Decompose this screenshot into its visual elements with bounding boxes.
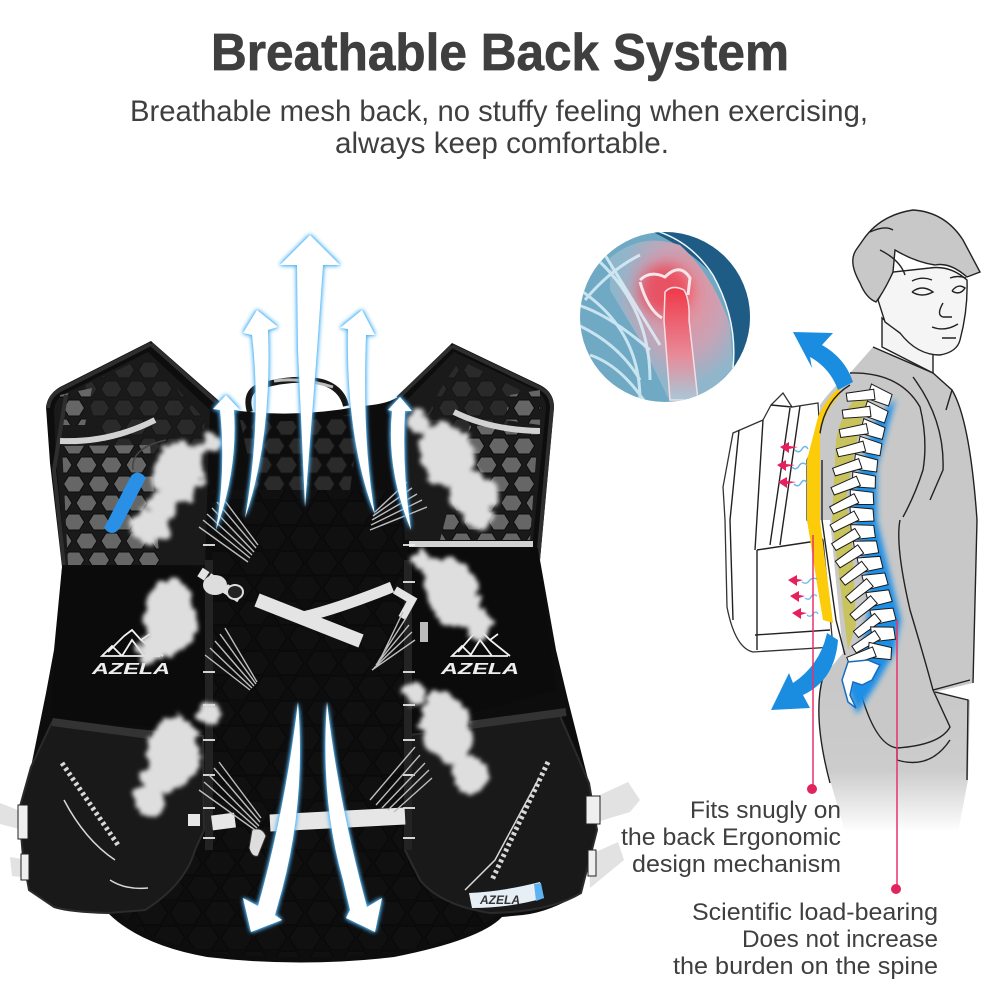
red glow — [639, 264, 691, 316]
humerus — [664, 287, 698, 400]
subtitle: Breathable mesh back, no stuffy feeling when exercising, — [130, 95, 868, 128]
spine glow — [848, 398, 901, 714]
right lower pocket — [405, 716, 597, 913]
callout: fits snugly: Fits snugly on — [690, 797, 841, 824]
side straps — [0, 782, 640, 888]
lower strap — [188, 816, 405, 823]
pocket shirring — [52, 712, 566, 735]
shirt — [820, 347, 977, 750]
face — [878, 268, 967, 355]
subtitle: always keep comfortable. — [335, 127, 669, 160]
clothing lines — [819, 347, 977, 783]
motion lines — [199, 482, 432, 830]
callout: fits snugly — [621, 797, 841, 878]
running vest — [18, 341, 600, 962]
dashed zipper details — [62, 762, 548, 890]
skin tone — [610, 241, 733, 402]
light hex left — [60, 388, 160, 565]
spine vertebrae — [829, 377, 898, 670]
blue curved arrow down — [771, 633, 838, 710]
steam clouds — [130, 411, 498, 816]
blue curved arrow up — [793, 332, 853, 390]
green yellow band — [832, 397, 868, 650]
callout: load-bearing: Does not increase — [742, 926, 938, 953]
callout: load-bearing: Scientific load-bearing — [692, 899, 938, 926]
callout lines — [807, 535, 901, 894]
bottom label — [469, 882, 544, 908]
facial features — [870, 228, 966, 338]
upper back hex — [240, 412, 361, 490]
right shoulder panel — [395, 352, 546, 540]
left lower pocket — [19, 722, 204, 913]
callout: load-bearing: the burden on the spine — [673, 953, 938, 980]
trousers — [819, 677, 970, 832]
title: Breathable Back System — [211, 24, 789, 82]
yellow padding — [807, 387, 840, 623]
light hex right — [440, 390, 540, 540]
lumbar strap lines — [820, 385, 850, 655]
person with backpack — [723, 210, 980, 832]
left shoulder panel — [54, 352, 210, 565]
callout: fits snugly: design mechanism — [632, 851, 841, 878]
bottom label: AZELA — [479, 893, 520, 907]
strap toggle — [249, 829, 266, 856]
lower hem hex — [112, 850, 500, 957]
hair — [853, 210, 980, 302]
buckles — [203, 575, 428, 642]
heat arrows bottom — [788, 575, 818, 619]
dim hex on right shoulder — [420, 360, 520, 430]
rib base — [580, 232, 750, 402]
reflective strips — [60, 412, 540, 544]
dim hex on left shoulder — [85, 356, 205, 470]
vertical webbing — [203, 545, 415, 850]
logo right: AZELA — [440, 661, 519, 678]
sacrum — [842, 660, 880, 708]
logo left: AZELA — [91, 661, 170, 678]
center back hex — [212, 490, 402, 850]
binding — [48, 344, 552, 565]
logo left — [91, 630, 170, 678]
right upper pocket — [408, 548, 556, 730]
air arrows down — [243, 702, 382, 932]
ribs — [578, 255, 660, 402]
drink tube — [133, 440, 166, 470]
top handle — [248, 380, 346, 412]
drink valve — [104, 472, 146, 533]
dark crescent — [654, 232, 750, 368]
logo right — [440, 630, 519, 678]
backpack — [723, 393, 833, 652]
callout: fits snugly: the back Ergonomic — [621, 824, 841, 851]
shoulder x-ray circle — [580, 232, 750, 402]
white edge — [653, 230, 734, 368]
air arrows up — [213, 235, 412, 530]
backpack lines — [730, 405, 830, 650]
vest body — [19, 341, 597, 962]
front cross straps — [200, 572, 412, 641]
neck — [882, 318, 933, 373]
subtitle — [130, 95, 868, 160]
side buckles — [18, 796, 600, 880]
left upper pocket — [50, 565, 205, 730]
heat arrows top — [777, 442, 808, 488]
joint — [640, 270, 690, 318]
callout: load-bearing — [673, 899, 938, 980]
